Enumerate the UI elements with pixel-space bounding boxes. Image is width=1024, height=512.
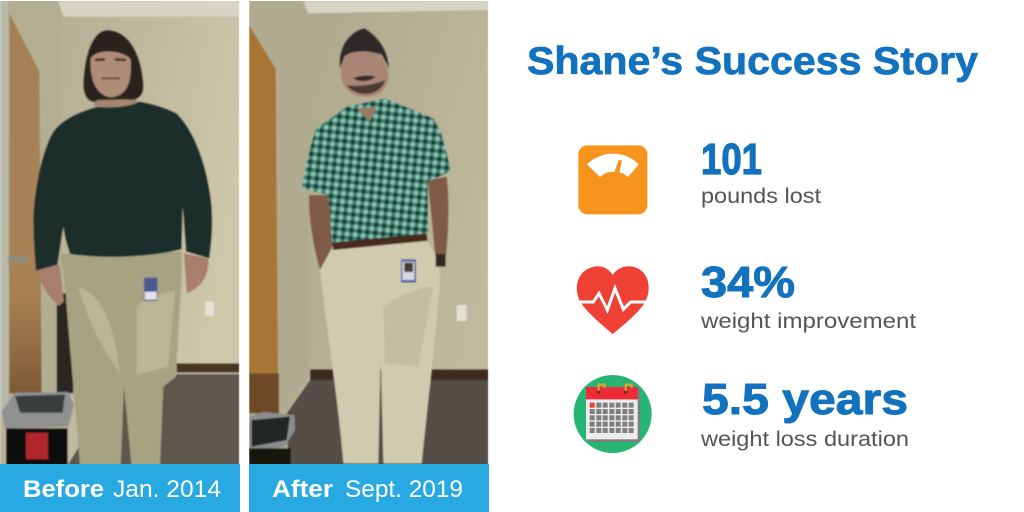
stat label: pounds lost: pounds lost [701, 185, 821, 208]
stat label: weight improvement: weight improvement [700, 310, 916, 333]
icon: heart with pulse line [577, 266, 649, 334]
stat: pounds lost [578, 135, 821, 214]
caption bar: before [0, 464, 240, 512]
caption bar: after [249, 464, 489, 512]
stat value: 34%: 34% [701, 258, 795, 307]
icon: weighing scale [578, 145, 647, 214]
photo: man after weight loss [249, 0, 488, 467]
stat: weight improvement [577, 258, 916, 334]
caption bar: after: Sept. 2019 [345, 476, 463, 503]
photo: man before weight loss [0, 0, 239, 467]
stat: weight loss duration [574, 375, 909, 453]
stat value: 101: 101 [701, 135, 762, 184]
caption bar: before: Jan. 2014 [113, 476, 221, 503]
icon: calendar [574, 375, 652, 453]
caption bar: after: After [272, 476, 333, 503]
panel: before photo [0, 0, 240, 512]
stat label: weight loss duration: weight loss duration [700, 428, 909, 451]
caption bar: before: Before [23, 476, 104, 503]
panel: after photo [249, 0, 489, 512]
stat value: 5.5 years: 5.5 years [702, 375, 908, 424]
title: Shane’s Success Story [527, 40, 979, 83]
